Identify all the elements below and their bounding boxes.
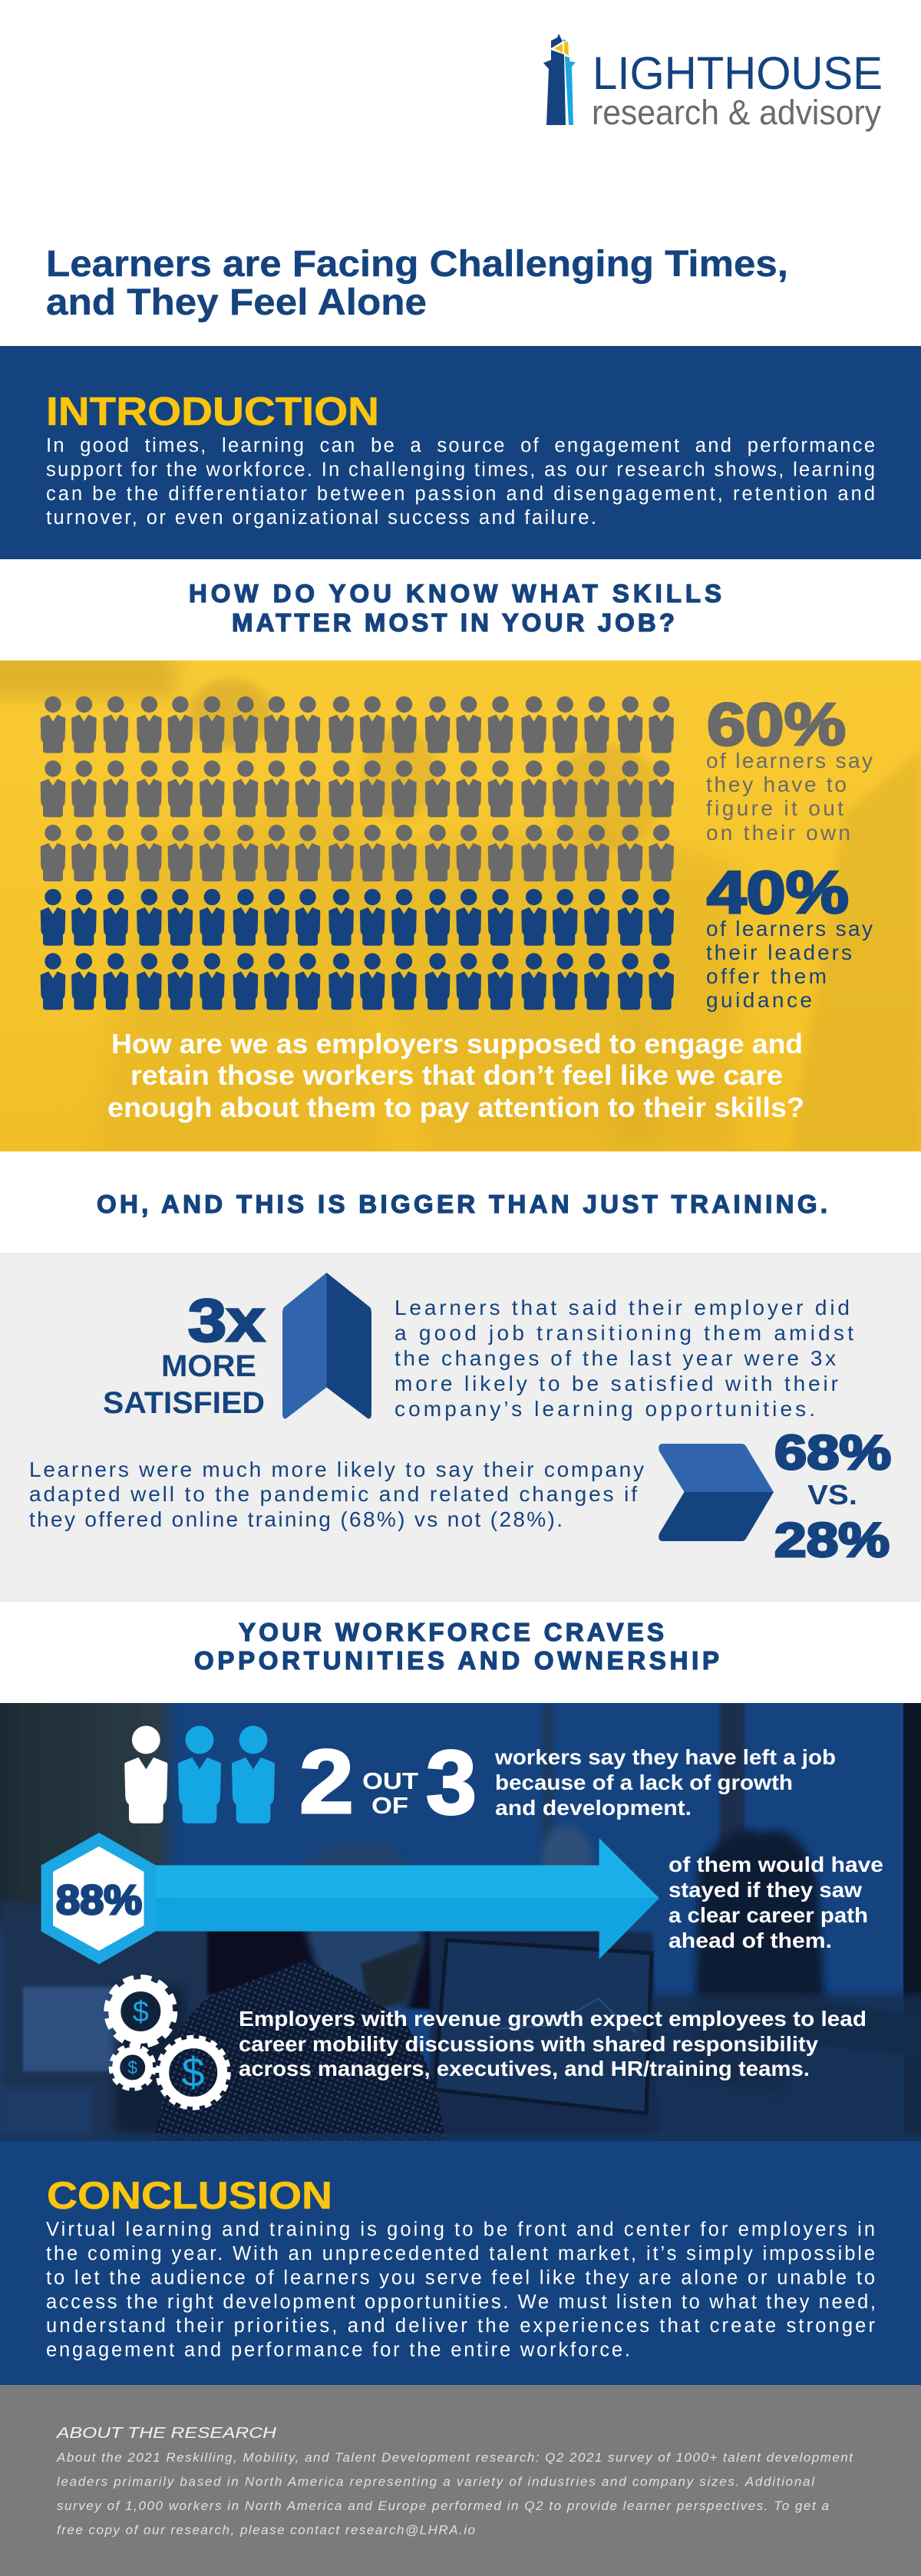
about text: free copy of our research, please contact research@LHRA.io: [57, 2522, 475, 2538]
stat: 3x more satisfied: [103, 1286, 265, 1420]
text: revenue growth employers: career mobility discussions with shared responsibility: [239, 2032, 818, 2056]
about heading: ABOUT THE RESEARCH: [56, 2425, 277, 2442]
stat: 2 out of 3: OUT: [362, 1767, 418, 1794]
conclusion text: to let the audience of learners you serve feel like they are alone or unable to: [46, 2268, 875, 2289]
text: revenue growth employers: [239, 2007, 867, 2080]
stat: 60 percent: of learners say: [706, 749, 873, 772]
stat: 60 percent: on their own: [706, 821, 850, 845]
icon: three gears with dollar signs: $: [182, 2050, 205, 2096]
icon grid: 60 percent gray people: [41, 697, 674, 881]
woman silhouette: [695, 1830, 825, 2094]
text: transitioning: more likely to be satisfied with their: [394, 1372, 838, 1395]
panel: yellow stats: [0, 652, 921, 1151]
stat: 3x more satisfied: MORE: [161, 1349, 256, 1383]
introduction text: In good times, learning can be a source of engagement and performance: [46, 435, 875, 456]
badge: 88 percent: [41, 1833, 156, 1964]
text: revenue growth employers: Employers with revenue growth expect employees to lead: [239, 2007, 867, 2031]
man head: [295, 1841, 424, 2010]
icon: right chevron: [659, 1444, 774, 1541]
stat: 60 percent: figure it out: [706, 796, 843, 820]
text: transitioning: [394, 1296, 853, 1421]
heading: how do you know: HOW DO YOU KNOW WHAT SKILLS: [189, 579, 721, 608]
introduction text: support for the workforce. In challenging times, as our research shows, learning: [46, 459, 875, 480]
introduction text: turnover, or even organizational success and failure.: [46, 507, 596, 529]
title: [46, 244, 788, 323]
stat: 68 vs 28 percent: 28%: [774, 1514, 890, 1567]
stat: 3x more satisfied: SATISFIED: [103, 1386, 265, 1420]
text: left a job: [494, 1745, 836, 1820]
stat: 2 out of 3: 2: [299, 1731, 354, 1833]
introduction heading: INTRODUCTION: [46, 390, 379, 434]
stat: 60 percent: 60%: [707, 690, 846, 758]
text: would have stayed: stayed if they saw: [668, 1878, 862, 1902]
introduction text: [46, 435, 875, 529]
logo tagline: research & advisory: [592, 93, 881, 132]
icon: three gears with dollar signs: [107, 1978, 229, 2108]
stat: 2 out of 3: [299, 1731, 477, 1833]
panel: about the research: [0, 2385, 921, 2576]
icon: three gears with dollar signs: $: [127, 2057, 137, 2077]
stat: 68 vs 28 percent: 68%: [774, 1426, 891, 1480]
photo background: yellow tinted office: [0, 652, 921, 1151]
heading: workforce craves: [194, 1618, 719, 1675]
panel: dark photo stats: [0, 1695, 921, 2148]
conclusion text: engagement and performance for the entire workforce.: [46, 2340, 630, 2361]
heading: how do you know: MATTER MOST IN YOUR JOB?: [232, 608, 675, 637]
text: online training: they offered online training (68%) vs not (28%).: [29, 1507, 563, 1531]
conclusion text: access the right development opportunities. We must listen to what they need,: [46, 2291, 876, 2313]
man shoulders shirt: [153, 1961, 445, 2144]
stat: 3x more satisfied: 3x: [188, 1286, 265, 1354]
title: and They Feel Alone: [46, 282, 427, 323]
text: would have stayed: of them would have: [668, 1853, 883, 1876]
photo background: office worker at monitor: [0, 1695, 921, 2148]
badge: 88 percent: 88%: [56, 1877, 142, 1923]
panel: gray satisfaction stats: [0, 1253, 921, 1602]
stat: 40 percent: of learners say: [706, 917, 873, 940]
text: transitioning: the changes of the last year were 3x: [394, 1346, 836, 1370]
stat: 68 vs 28 percent: VS.: [807, 1479, 857, 1510]
heading: workforce craves: YOUR WORKFORCE CRAVES: [239, 1618, 664, 1646]
stat: 60 percent: [706, 690, 873, 845]
icon: three gears with dollar signs: $: [133, 1996, 149, 2028]
logo: Lighthouse Research & Advisory: [543, 34, 883, 132]
conclusion heading: CONCLUSION: [47, 2174, 332, 2217]
panel: introduction: [0, 346, 921, 559]
about text: survey of 1,000 workers in North America and Europe performed in Q2 to provide learner perspectives. To get a: [57, 2499, 829, 2513]
icon: lighthouse: [543, 34, 576, 125]
icon grid: 40 percent blue people: [41, 889, 674, 1010]
text: transitioning: company’s learning opportunities.: [394, 1397, 815, 1421]
callout question: retain those workers that don’t feel like we care: [130, 1059, 783, 1091]
about text: leaders primarily based in North America representing a variety of industries and company sizes. Additional: [57, 2475, 815, 2489]
logo wordmark: LIGHTHOUSE: [593, 48, 883, 99]
text: would have stayed: [668, 1853, 883, 1952]
text: left a job: and development.: [495, 1796, 692, 1820]
stat: 68 vs 28 percent: [774, 1426, 891, 1567]
text: transitioning: a good job transitioning them amidst: [394, 1321, 853, 1345]
text: transitioning: Learners that said their employer did: [394, 1296, 850, 1319]
text: would have stayed: ahead of them.: [668, 1929, 832, 1952]
introduction text: can be the differentiator between passion and disengagement, retention and: [46, 483, 875, 505]
icon: three people, one highlighted: [124, 1726, 275, 1823]
about text: [56, 2450, 853, 2538]
text: left a job: workers say they have left a job: [494, 1745, 836, 1769]
conclusion text: Virtual learning and training is going to be front and center for employers in: [46, 2219, 875, 2240]
callout question: [107, 1028, 804, 1123]
text: online training: [29, 1458, 644, 1531]
stat: 60 percent: they have to: [706, 772, 847, 796]
conclusion text: understand their priorities, and deliver the experiences that create stronger: [46, 2315, 875, 2337]
stat: 40 percent: guidance: [706, 988, 812, 1012]
about text: About the 2021 Reskilling, Mobility, and Talent Development research: Q2 2021 survey of 1000+ talent development: [56, 2450, 853, 2465]
text: left a job: because of a lack of growth: [495, 1771, 793, 1794]
callout question: How are we as employers supposed to engage and: [111, 1028, 803, 1059]
title: Learners are Facing Challenging Times,: [46, 244, 788, 285]
stat: 40 percent: [706, 858, 873, 1012]
conclusion text: the coming year. With an unprecedented talent market, it’s simply impossible: [46, 2243, 875, 2265]
heading: workforce craves: OPPORTUNITIES AND OWNERSHIP: [194, 1646, 719, 1675]
conclusion text: [46, 2219, 876, 2361]
monitor: [434, 1940, 652, 2113]
text: would have stayed: a clear career path: [668, 1903, 868, 1927]
stat: 40 percent: 40%: [707, 858, 849, 926]
text: online training: adapted well to the pandemic and related changes if: [29, 1482, 637, 1506]
stat: 40 percent: offer them: [706, 964, 827, 988]
stat: 2 out of 3: OF: [371, 1792, 408, 1819]
callout question: enough about them to pay attention to their skills?: [107, 1092, 804, 1123]
stat: 40 percent: their leaders: [706, 940, 852, 964]
stat: 2 out of 3: 3: [426, 1732, 477, 1833]
heading: how do you know: [189, 579, 721, 637]
heading: bigger than training: OH, AND THIS IS BIGGER THAN JUST TRAINING.: [97, 1190, 827, 1218]
panel: conclusion: [0, 2141, 921, 2385]
text: online training: Learners were much more likely to say their company: [29, 1458, 644, 1481]
icon: up chevron: [282, 1273, 371, 1418]
arrow: [154, 1838, 659, 1959]
text: revenue growth employers: across managers, executives, and HR/training teams.: [239, 2057, 810, 2080]
